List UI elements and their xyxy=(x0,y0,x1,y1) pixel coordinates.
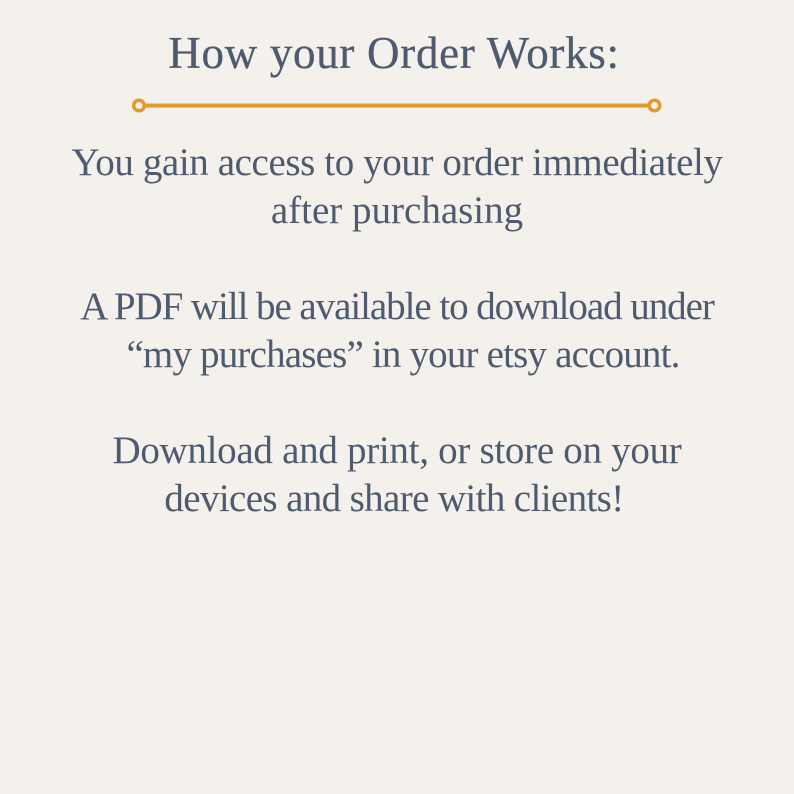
text block: access xyxy=(71,141,723,232)
divider line with circular ends xyxy=(132,98,662,112)
text block: access: You gain access to your order immediately xyxy=(71,141,723,184)
text block: print or store xyxy=(112,429,682,520)
title: How your Order Works: xyxy=(168,28,620,78)
text block: PDF download: A PDF will be available to download under xyxy=(80,285,714,328)
text block: access: after purchasing xyxy=(271,189,523,232)
text block: print or store: devices and share with clients! xyxy=(164,477,624,520)
text block: print or store: Download and print, or store on your xyxy=(112,429,682,472)
text block: PDF download xyxy=(80,285,715,376)
text block: PDF download: “my purchases” in your etsy account. xyxy=(126,333,680,376)
